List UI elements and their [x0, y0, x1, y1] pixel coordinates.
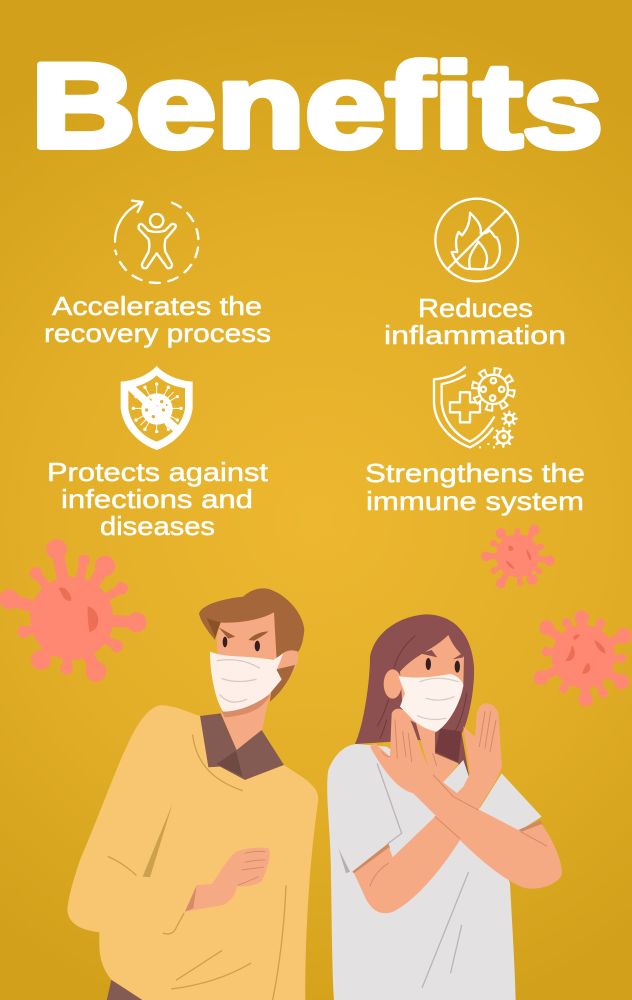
woman: shirt folds [377, 764, 468, 987]
man: mask [210, 652, 283, 712]
woman: crossing right arm and hand [370, 709, 562, 889]
label: accelerates the recovery process: Accelerates the [52, 291, 262, 321]
panel: recovery benefit [44, 201, 271, 348]
woman: raised left arm and hand [354, 703, 502, 913]
man: sweater [67, 705, 318, 1000]
man: collar [200, 713, 284, 780]
man: face [217, 612, 278, 713]
panel: inflammation benefit [384, 199, 566, 350]
man: shadow under mask [222, 695, 270, 717]
label: strengthens the immune system: Strengthens the [365, 458, 585, 488]
man: sweater folds [108, 735, 286, 1000]
label: reduces inflammation: Reduces [418, 293, 533, 323]
icon: large virus left [0, 539, 147, 682]
man: hand [185, 848, 270, 912]
label: strengthens the immune system: immune system [366, 486, 584, 516]
icon: person with circular arrow [115, 201, 198, 283]
man: hair [199, 588, 304, 660]
panel: infections benefit [47, 366, 269, 541]
label: protects against infections and diseases [47, 457, 269, 541]
woman: sleeve shadows [352, 820, 543, 874]
label: accelerates the recovery process: recovery process [44, 318, 271, 348]
woman: hair [355, 614, 474, 782]
man: ear and neck [221, 693, 270, 752]
man with mask [67, 588, 318, 1000]
icon: crossed-out flame [435, 199, 518, 281]
woman: brows and eyes [420, 650, 463, 673]
label: protects against infections and diseases: infections and [61, 484, 253, 514]
man: brows and eyes [219, 627, 269, 651]
label: protects against infections and diseases: diseases [100, 511, 215, 541]
label: reduces inflammation: inflammation [384, 320, 566, 350]
label: strengthens the immune system [365, 458, 585, 516]
icon: medium virus right [534, 610, 632, 706]
label: reduces inflammation [384, 293, 566, 350]
icon: small virus right [481, 525, 555, 588]
woman: mask [392, 674, 463, 732]
woman: arm and finger lines [370, 712, 547, 886]
man: trousers [107, 978, 147, 1000]
woman: face [400, 635, 464, 733]
panel: immune benefit [365, 367, 585, 516]
woman: shirt [327, 744, 542, 1000]
title: Benefits [31, 39, 603, 173]
woman with mask [327, 614, 562, 1000]
woman: ear [384, 669, 402, 699]
label: accelerates the recovery process [44, 291, 271, 348]
woman: neck [415, 720, 458, 785]
label: protects against infections and diseases: Protects against [47, 457, 269, 487]
icon: shield with crossed-out virus [121, 366, 193, 450]
icon: shield with cross and germs [434, 367, 517, 447]
